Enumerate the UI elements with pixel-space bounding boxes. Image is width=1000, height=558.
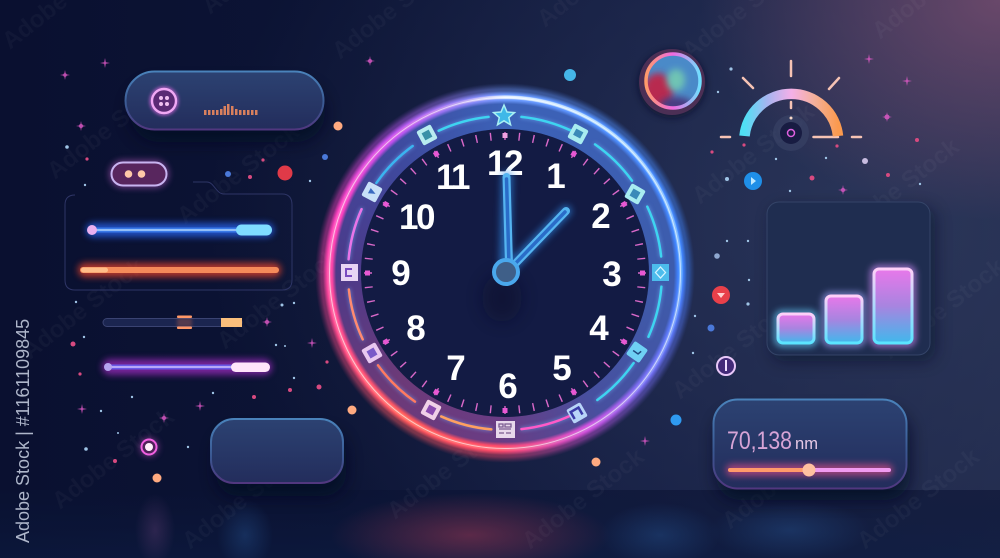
value text: 70,138 xyxy=(727,427,792,455)
icon: four dot button xyxy=(151,88,177,114)
clock numerals: 11 xyxy=(436,158,470,197)
stock id vertical text: Adobe Stock | #1161109845 xyxy=(13,319,33,543)
clock band xyxy=(332,102,676,446)
clock numerals: 12 xyxy=(487,144,523,183)
outer neon glow xyxy=(315,83,695,463)
watermarks: Adobe Stock xyxy=(382,413,515,525)
inner arc segments xyxy=(286,54,724,492)
watermarks: Adobe Stock xyxy=(177,443,310,555)
ring badges xyxy=(341,105,669,438)
value slider xyxy=(726,464,893,476)
watermarks: Adobe Stock xyxy=(517,443,650,555)
watermarks: Adobe Stock xyxy=(172,118,305,230)
watermarks: Adobe Stock xyxy=(212,243,345,355)
dial xyxy=(361,129,649,417)
slider: orange neon xyxy=(78,263,281,277)
clock numerals: 7 xyxy=(446,349,466,388)
watermarks: Adobe Stock xyxy=(717,423,850,535)
hour markers xyxy=(365,133,645,413)
clock numerals: 3 xyxy=(602,255,622,294)
watermarks: Adobe Stock xyxy=(47,403,180,515)
clock numerals: 1 xyxy=(546,157,566,196)
clock numerals xyxy=(391,144,622,406)
clock face svg xyxy=(329,97,681,449)
clock hands xyxy=(494,177,566,284)
equalizer bars xyxy=(204,104,258,115)
outer neon line xyxy=(328,95,683,450)
watermarks: Adobe Stock xyxy=(17,253,150,365)
clock numerals: 8 xyxy=(406,309,426,348)
watermarks: Adobe Stock xyxy=(832,133,965,245)
clock numerals: 4 xyxy=(589,309,609,348)
clock numerals: 5 xyxy=(552,349,572,388)
outer wide glow xyxy=(315,83,695,463)
clock numerals: 6 xyxy=(498,367,518,406)
watermarks: Adobe Stock xyxy=(42,73,175,185)
panel: value readout card: nm xyxy=(795,434,818,453)
watermarks: Adobe Stock xyxy=(687,98,820,210)
icon: glowing orb xyxy=(636,48,708,120)
clock xyxy=(316,84,694,462)
watermarks: Adobe Stock xyxy=(852,443,985,555)
clock numerals: 2 xyxy=(591,197,611,236)
clock numerals: 10 xyxy=(399,198,435,237)
clock numerals: 9 xyxy=(391,254,411,293)
minute ticks xyxy=(368,136,642,410)
watermarks: Adobe Stock xyxy=(667,293,800,405)
slider: blue neon xyxy=(86,223,274,237)
